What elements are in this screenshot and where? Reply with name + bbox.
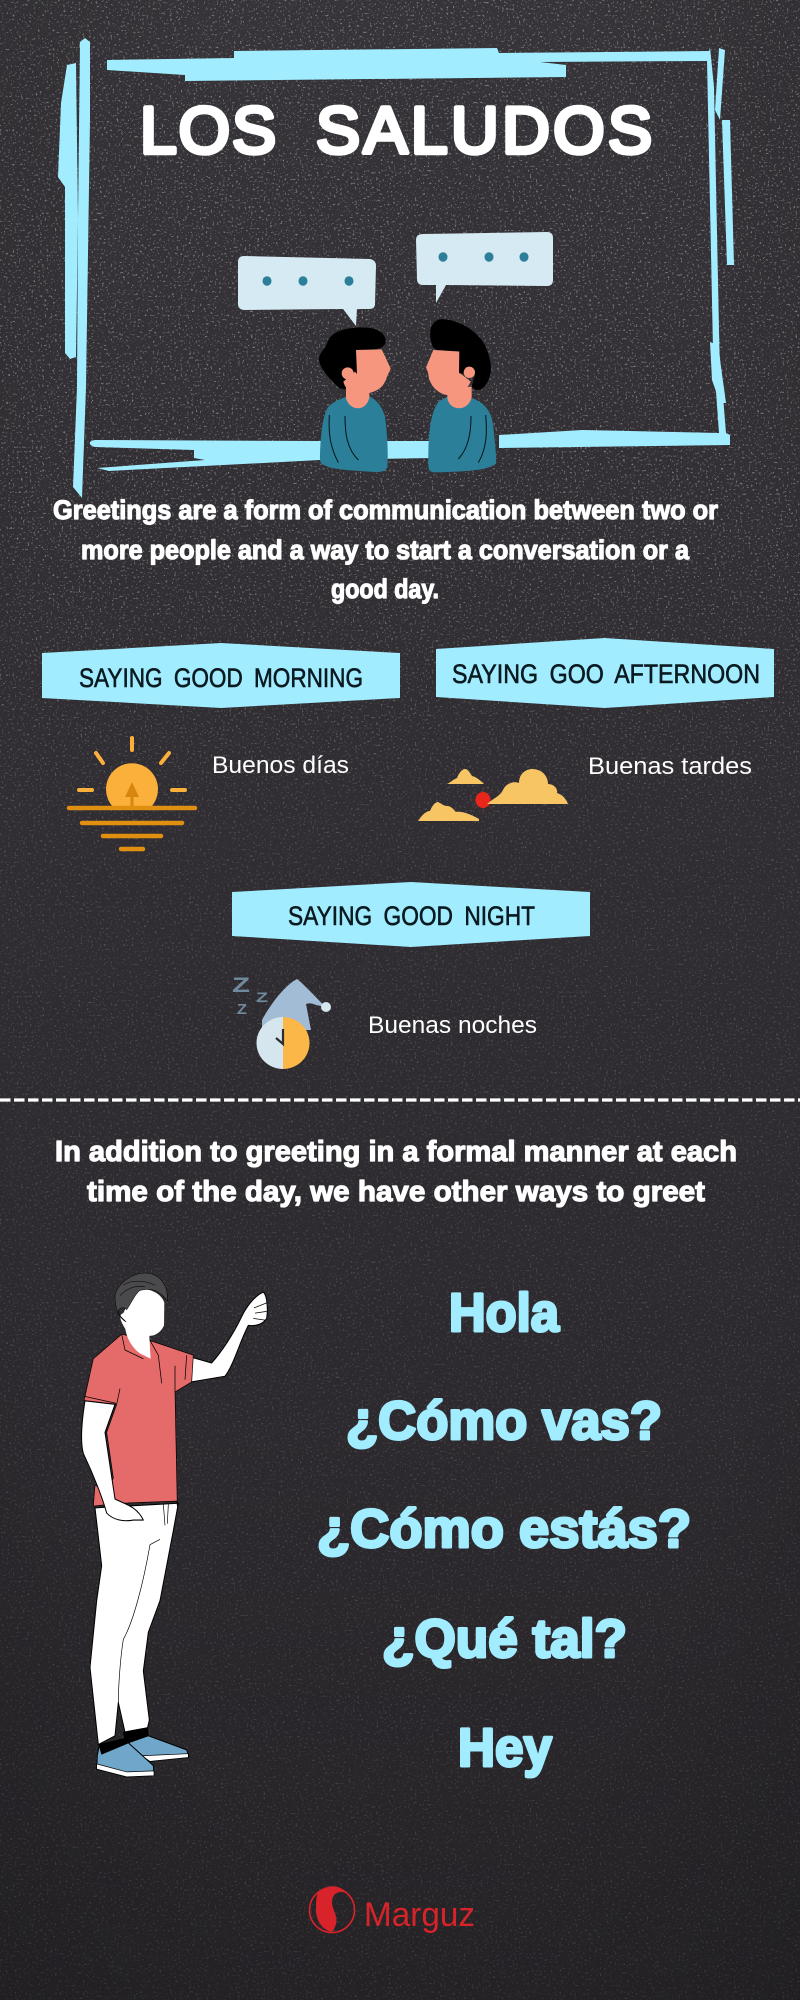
greeting phrases: Hola (449, 1283, 560, 1343)
icon: sun behind clouds (418, 769, 568, 821)
banner: saying good morning: SAYING GOOD MORNING (79, 663, 363, 693)
two people talking (319, 319, 496, 472)
shoes (128, 1736, 189, 1761)
intro paragraph: more people and a way to start a conversation or a (81, 535, 690, 565)
banner: saying good night: SAYING GOOD NIGHT (288, 901, 535, 931)
greeting phrases: ¿Cómo estás? (317, 1499, 691, 1559)
speech bubble: left (238, 256, 376, 326)
title: LOS (140, 93, 276, 167)
second paragraph: In addition to greeting in a formal manner at each (55, 1136, 737, 1168)
greeting phrases (317, 1283, 691, 1778)
man in red polo shirt (82, 1273, 267, 1777)
shirt (84, 1334, 193, 1506)
lowered arm (82, 1401, 143, 1521)
intro paragraph: good day. (331, 574, 439, 604)
greeting phrases: Hey (458, 1718, 552, 1778)
logo: marguz: Marguz (364, 1896, 475, 1934)
title: SALUDOS (316, 93, 652, 167)
banner: saying good afternoon: SAYING GOO AFTERNOON (452, 659, 760, 689)
person: right (426, 319, 496, 472)
icon: sleeping clock (232, 974, 331, 1069)
icon: sleeping clock: Z (237, 1001, 247, 1018)
label: buenos dias: Buenos días (212, 752, 349, 779)
intro paragraph: Greetings are a form of communication between two or (53, 495, 718, 525)
hand-drawn title frame (58, 38, 734, 498)
logo: marguz (310, 1886, 475, 1934)
socks (99, 1728, 148, 1754)
second paragraph: time of the day, we have other ways to greet (87, 1176, 705, 1208)
person: left (319, 327, 391, 472)
fingers (253, 1303, 267, 1320)
second paragraph (55, 1136, 737, 1208)
greeting phrases: ¿Cómo vas? (346, 1391, 662, 1451)
icon: sleeping clock: Z (256, 989, 269, 1005)
intro paragraph (53, 495, 718, 604)
raised arm (191, 1292, 267, 1382)
banner: saying good night (232, 882, 590, 947)
icon: sunrise (69, 738, 195, 849)
greeting phrases: ¿Qué tal? (382, 1609, 627, 1669)
title (140, 93, 652, 167)
hair (115, 1273, 167, 1322)
banner: saying good morning (42, 643, 400, 708)
speech bubble: right (416, 232, 553, 303)
label: buenas noches: Buenas noches (368, 1012, 537, 1039)
label: buenas tardes: Buenas tardes (588, 753, 752, 780)
neck and face (120, 1289, 164, 1359)
banner: saying good afternoon (436, 638, 774, 708)
trousers (90, 1503, 178, 1745)
dashed divider (0, 1098, 800, 1102)
icon: sleeping clock: Z (232, 974, 250, 997)
